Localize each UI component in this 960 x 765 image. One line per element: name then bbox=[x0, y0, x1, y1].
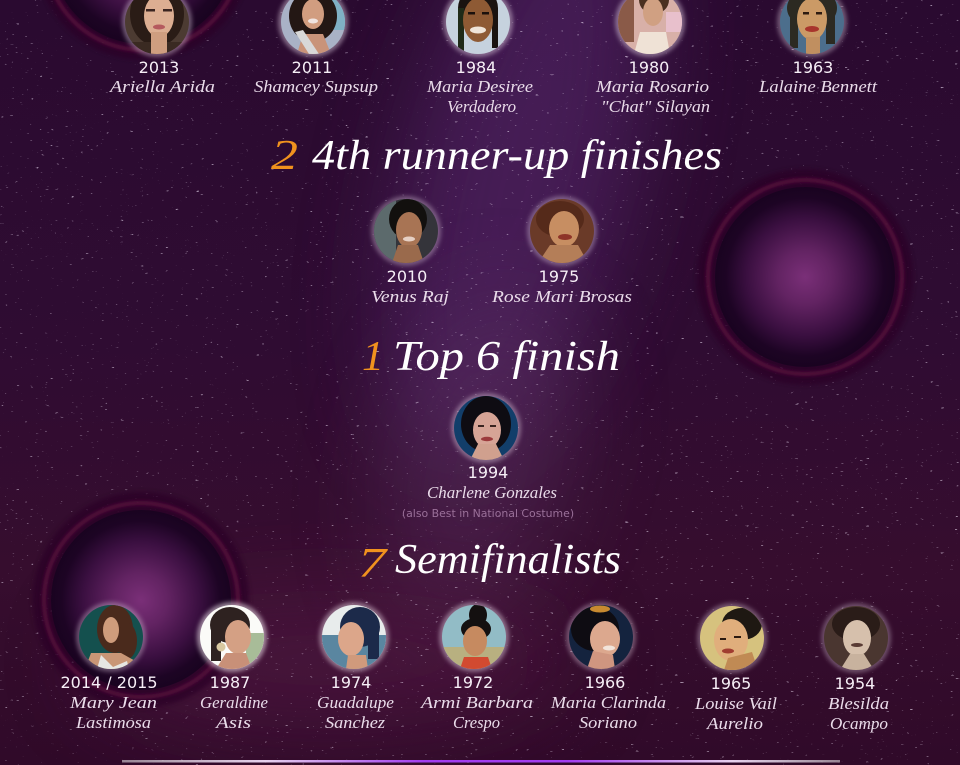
contestant: Mary Jean Lastimosa bbox=[60, 602, 158, 732]
name: Mary Jean Lastimosa: Lastimosa bbox=[75, 713, 151, 732]
name: Maria Desiree Verdadero: Verdadero bbox=[447, 97, 516, 116]
year: 1966: 1966 bbox=[585, 673, 625, 692]
name: Armi Barbara Crespo: Crespo bbox=[453, 713, 500, 732]
name: Guadalupe Sanchez: Sanchez bbox=[325, 713, 385, 732]
portrait: Maria Clarinda Soriano bbox=[566, 602, 636, 672]
portrait: Mary Jean Lastimosa bbox=[76, 602, 146, 672]
heading text: Semifinalists bbox=[395, 537, 621, 583]
contestant: Ariella Arida bbox=[109, 0, 215, 96]
year: 1987: 1987 bbox=[210, 673, 250, 692]
portrait: Armi Barbara Crespo bbox=[439, 602, 509, 672]
name: Geraldine Asis: Asis bbox=[215, 713, 251, 732]
name: Blesilda Ocampo: Blesilda bbox=[828, 694, 889, 713]
year: 1980: 1980 bbox=[629, 58, 669, 77]
name: Mary Jean Lastimosa: Mary Jean bbox=[69, 693, 157, 712]
portrait: Blesilda Ocampo bbox=[821, 603, 891, 673]
heading text: 4th runner-up finishes bbox=[312, 133, 722, 179]
portrait: Shamcey Supsup bbox=[278, 0, 348, 57]
contestant: Lalaine Bennett bbox=[758, 0, 878, 96]
contestant: Maria Rosario Silayan bbox=[595, 0, 710, 116]
portrait: Charlene Gonzales bbox=[451, 393, 521, 463]
year: 1972: 1972 bbox=[453, 673, 493, 692]
year: 1984: 1984 bbox=[456, 58, 496, 77]
decorative orb: lower left bbox=[33, 492, 249, 708]
decorative orb: right bbox=[697, 169, 913, 385]
contestant: Venus Raj bbox=[371, 196, 449, 306]
portrait: Venus Raj bbox=[371, 196, 441, 266]
gradient divider line bbox=[122, 760, 840, 762]
portrait: Maria Rosario Silayan bbox=[615, 0, 685, 57]
group: 3rd-runner-up row (cropped at top) bbox=[109, 0, 878, 116]
year: 1965: 1965 bbox=[711, 674, 751, 693]
name: Charlene Gonzales: Charlene Gonzales bbox=[427, 483, 557, 502]
year: 1963: 1963 bbox=[793, 58, 833, 77]
name: Louise Vail Aurelio: Aurelio bbox=[706, 714, 763, 733]
contestant: Maria Desiree Verdadero bbox=[426, 0, 533, 116]
heading: 2 4th runner-up finishes bbox=[271, 133, 722, 179]
name: Maria Clarinda Soriano: Soriano bbox=[579, 713, 637, 732]
contestant: Shamcey Supsup bbox=[254, 0, 378, 96]
name: Maria Desiree Verdadero: Maria Desiree bbox=[426, 77, 533, 96]
contestant: Louise Vail Aurelio bbox=[694, 603, 777, 733]
name: Maria Clarinda Soriano: Maria Clarinda bbox=[550, 693, 666, 712]
portrait: Lalaine Bennett bbox=[777, 0, 847, 57]
year: 2014 / 2015: 2014 / 2015 bbox=[60, 673, 158, 692]
heading: 7 Semifinalists bbox=[358, 537, 621, 587]
name: Ariella Arida: Ariella Arida bbox=[109, 77, 215, 96]
year: 1994: 1994 bbox=[468, 463, 508, 482]
group: 4th runner-up contestants bbox=[371, 196, 632, 306]
contestant: Armi Barbara Crespo bbox=[420, 602, 533, 732]
name: Maria Rosario "Chat" Silayan: Maria Rosario bbox=[595, 77, 709, 96]
year: 2010: 2010 bbox=[387, 267, 427, 286]
contestant: Rose Mari Brosas bbox=[491, 196, 632, 306]
contestant: Maria Clarinda Soriano bbox=[550, 602, 666, 732]
year: 1974: 1974 bbox=[331, 673, 371, 692]
heading text: Top 6 finish bbox=[393, 334, 620, 380]
year: 2013: 2013 bbox=[139, 58, 179, 77]
contestant: Blesilda Ocampo bbox=[821, 603, 891, 733]
portrait: Guadalupe Sanchez bbox=[319, 602, 389, 672]
name: Geraldine Asis: Geraldine bbox=[200, 693, 268, 712]
name: Rose Mari Brosas: Rose Mari Brosas bbox=[491, 287, 632, 306]
name: Guadalupe Sanchez: Guadalupe bbox=[317, 693, 394, 712]
note: also Best in National Costume: (also Best in National Costume) bbox=[402, 507, 574, 520]
year: 1975: 1975 bbox=[539, 267, 579, 286]
year: 2011: 2011 bbox=[292, 58, 332, 77]
name: Louise Vail Aurelio: Louise Vail bbox=[694, 694, 777, 713]
name: Maria Rosario "Chat" Silayan: "Chat" Silayan bbox=[601, 97, 710, 116]
name: Lalaine Bennett: Lalaine Bennett bbox=[758, 77, 878, 96]
portrait: Geraldine Asis bbox=[197, 602, 267, 672]
portrait: Louise Vail Aurelio bbox=[697, 603, 767, 673]
count: 7: 7 bbox=[358, 541, 389, 587]
name: Shamcey Supsup: Shamcey Supsup bbox=[254, 77, 378, 96]
count: 2: 2 bbox=[271, 133, 298, 179]
contestant: Guadalupe Sanchez bbox=[317, 602, 394, 732]
year: 1954: 1954 bbox=[835, 674, 875, 693]
contestant: Geraldine Asis bbox=[197, 602, 268, 732]
name: Venus Raj: Venus Raj bbox=[371, 287, 449, 306]
portrait: Rose Mari Brosas bbox=[527, 196, 597, 266]
portrait: Ariella Arida bbox=[122, 0, 192, 57]
decorative orb: top left bbox=[35, 0, 251, 60]
count: 1: 1 bbox=[362, 334, 384, 380]
name: Blesilda Ocampo: Ocampo bbox=[830, 714, 888, 733]
heading: 1 Top 6 finish bbox=[362, 334, 620, 380]
portrait: Maria Desiree Verdadero bbox=[443, 0, 513, 57]
contestant: Charlene Gonzales bbox=[402, 393, 574, 520]
name: Armi Barbara Crespo: Armi Barbara bbox=[420, 693, 533, 712]
group: semifinalist contestants bbox=[60, 602, 891, 733]
